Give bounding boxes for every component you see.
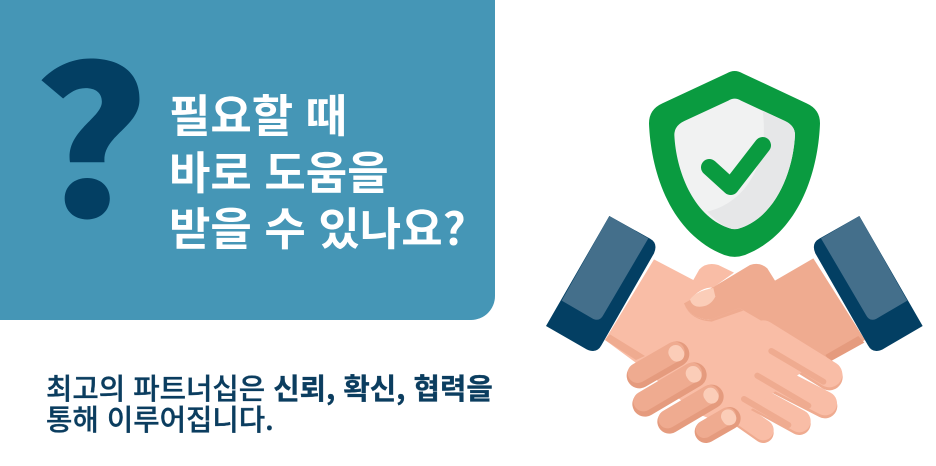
illustration: handshake xyxy=(546,216,923,433)
left cuff xyxy=(546,216,655,351)
left hand xyxy=(605,259,823,427)
icon: green shield with check xyxy=(649,71,820,257)
heading: question xyxy=(169,80,466,258)
dark hand fingers xyxy=(638,352,729,432)
right arm xyxy=(683,258,865,362)
heading: question: 필요할 때 xyxy=(169,80,347,145)
finger grooves xyxy=(744,351,823,425)
text block: partnership statement: 통해 이루어집니다. xyxy=(46,398,274,439)
right cuff xyxy=(814,216,923,351)
light hand fingers xyxy=(730,333,829,433)
heading: question: 바로 도움을 xyxy=(169,136,389,202)
panel: blue question panel xyxy=(0,0,495,320)
heading: question: 받을 수 있나요? xyxy=(169,193,466,258)
text block: partnership statement xyxy=(46,367,493,439)
text block: partnership statement: 최고의 파트너십은 신뢰, 확신, 협력을 xyxy=(46,367,493,408)
